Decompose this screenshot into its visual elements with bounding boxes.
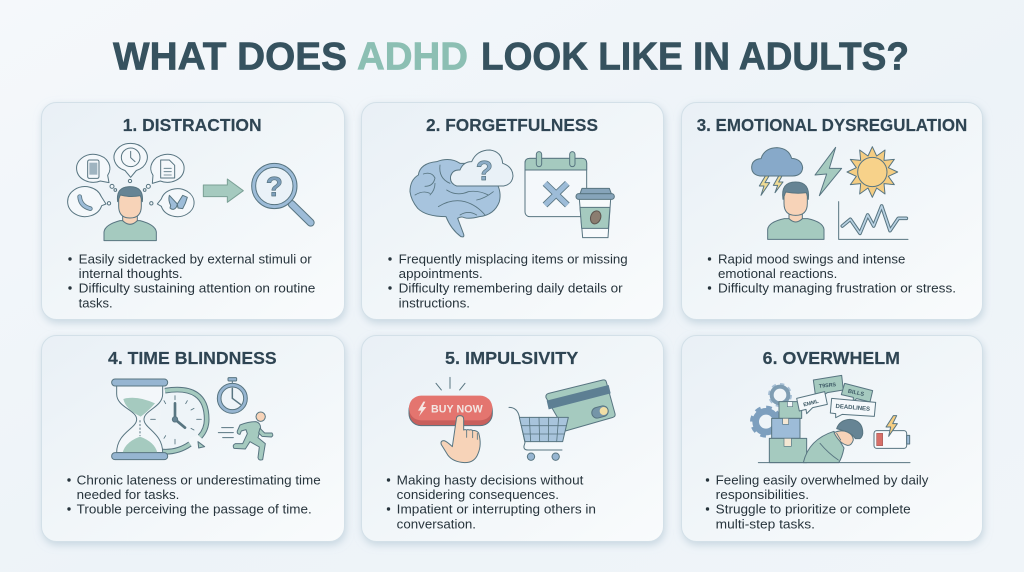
panel: 4. Time blindness bbox=[42, 336, 344, 542]
panel: 6. Overwhelm bbox=[682, 336, 982, 542]
text block: overwhelm bullets: responsibilities. bbox=[716, 487, 809, 502]
text block: forgetfulness bullets: instructions. bbox=[399, 295, 470, 310]
heading: 1. Distraction: 1. DISTRACTION bbox=[123, 115, 262, 135]
text block: distraction bullets bbox=[68, 251, 315, 310]
panel: 1. Distraction bbox=[42, 102, 344, 320]
icon: overwhelmed person with boxes, gears, messages and low battery: T9SRS bbox=[819, 382, 837, 390]
text block: emotional bullets: emotional reactions. bbox=[718, 266, 837, 281]
icon: distracted person with thought bubbles and magnifier: ? bbox=[266, 171, 283, 202]
text block: time bullets: Chronic lateness or underestimating time bbox=[77, 472, 321, 487]
panel: 5. Impulsivity bbox=[362, 336, 664, 542]
icon: brain with cloud, calendar and coffee bbox=[410, 150, 614, 238]
text block: overwhelm bullets: multi-step tasks. bbox=[716, 516, 815, 531]
heading: 2. Forgetfulness: 2. FORGETFULNESS bbox=[426, 115, 598, 135]
text block: distraction bullets: internal thoughts. bbox=[79, 266, 183, 281]
heading: 3. Emotional dysregulation: 3. EMOTIONAL DYSREGULATION bbox=[697, 115, 967, 135]
text block: forgetfulness bullets bbox=[388, 251, 628, 310]
title: ADHD bbox=[357, 36, 468, 78]
text block: distraction bullets: Difficulty sustaining attention on routine bbox=[79, 281, 315, 296]
icon: hourglass, broken clock, stopwatch and runner bbox=[112, 378, 273, 460]
heading: 6. Overwhelm: 6. OVERWHELM bbox=[763, 348, 900, 368]
text block: forgetfulness bullets: appointments. bbox=[399, 266, 483, 281]
heading: 5. Impulsivity: 5. IMPULSIVITY bbox=[445, 348, 579, 368]
text block: emotional bullets: Rapid mood swings and intense bbox=[718, 251, 905, 266]
text block: impulsivity bullets bbox=[387, 472, 596, 531]
text block: overwhelm bullets: Feeling easily overwhelmed by daily bbox=[716, 472, 929, 487]
text block: distraction bullets: Easily sidetracked by external stimuli or bbox=[79, 251, 312, 266]
icon: overwhelmed person with boxes, gears, messages and low battery: DEADLINES bbox=[835, 404, 870, 413]
text block: time bullets: Trouble perceiving the passage of time. bbox=[77, 502, 312, 517]
panel: 3. Emotional dysregulation bbox=[682, 102, 982, 320]
icon: buy now button, cart and credit card: BUY NOW bbox=[431, 403, 484, 415]
text block: overwhelm bullets: Struggle to prioritize or complete bbox=[716, 502, 911, 517]
title: LOOK LIKE IN ADULTS? bbox=[481, 36, 909, 78]
text block: overwhelm bullets bbox=[706, 472, 929, 531]
icon: overwhelmed person with boxes, gears, messages and low battery bbox=[752, 375, 910, 463]
text block: emotional bullets bbox=[708, 251, 956, 296]
icon: overwhelmed person with boxes, gears, messages and low battery: EMML bbox=[803, 399, 820, 409]
text block: impulsivity bullets: Impatient or interrupting others in bbox=[397, 502, 596, 517]
icon: buy now button, cart and credit card bbox=[409, 377, 615, 463]
text block: distraction bullets: tasks. bbox=[79, 295, 113, 310]
icon: storm, sun, person and mood chart bbox=[752, 147, 908, 239]
heading: 4. Time blindness: 4. TIME BLINDNESS bbox=[108, 348, 277, 368]
text block: impulsivity bullets: Making hasty decisions without bbox=[397, 472, 584, 487]
text block: forgetfulness bullets: Frequently misplacing items or missing bbox=[399, 251, 628, 266]
icon: brain with cloud, calendar and coffee: ? bbox=[476, 155, 493, 186]
title bbox=[113, 36, 909, 78]
panel: 2. Forgetfulness bbox=[362, 102, 664, 320]
text block: impulsivity bullets: considering consequences. bbox=[397, 487, 559, 502]
text block: time bullets bbox=[67, 472, 321, 517]
text block: forgetfulness bullets: Difficulty remembering daily details or bbox=[399, 281, 623, 296]
text block: impulsivity bullets: conversation. bbox=[397, 516, 476, 531]
title: WHAT DOES bbox=[113, 36, 347, 78]
icon: distracted person with thought bubbles and magnifier bbox=[68, 143, 311, 241]
text block: time bullets: needed for tasks. bbox=[77, 487, 179, 502]
icon: overwhelmed person with boxes, gears, messages and low battery: BILLS bbox=[847, 389, 865, 398]
text block: emotional bullets: Difficulty managing frustration or stress. bbox=[718, 281, 956, 296]
